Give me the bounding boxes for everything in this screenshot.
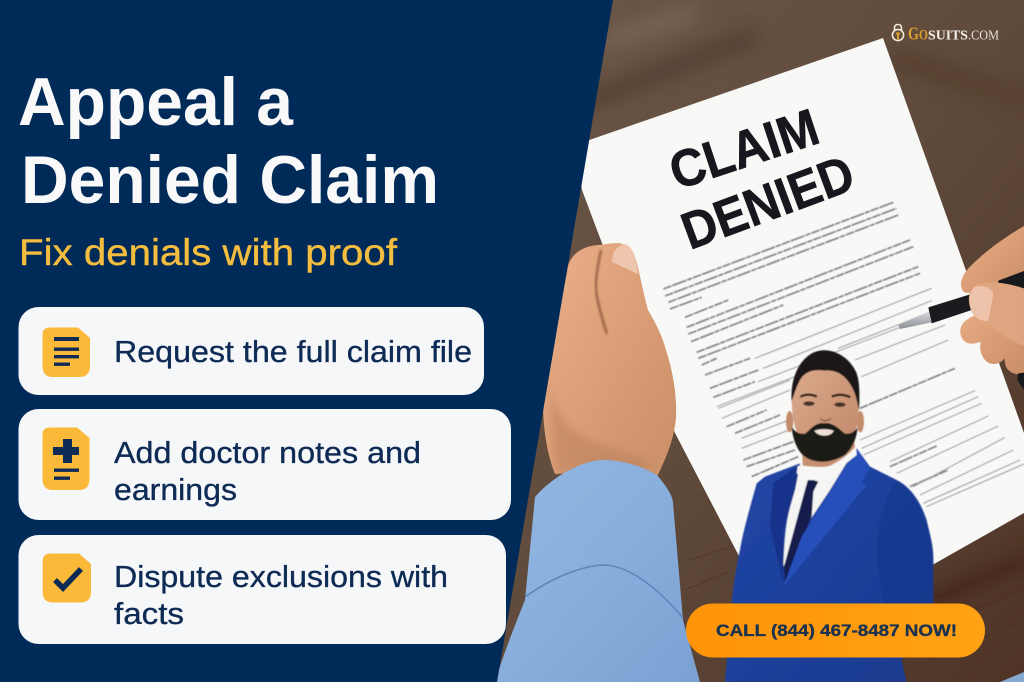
document heading: CLAIM DENIED: CLAIM — [663, 98, 826, 201]
label: earnings — [114, 472, 237, 507]
card: request file — [18, 307, 484, 395]
head — [786, 350, 864, 480]
title: Denied Claim — [21, 142, 439, 218]
sleeve shading — [876, 480, 933, 603]
title: Appeal a — [18, 64, 294, 140]
call to action button: CALL (844) 467-8487 NOW! — [716, 622, 957, 640]
thumb — [969, 282, 1024, 346]
suit jacket — [725, 447, 933, 682]
neck — [802, 430, 855, 479]
ears — [786, 411, 793, 432]
icon: lock shield — [892, 24, 904, 41]
label — [114, 559, 448, 631]
label: Dispute exclusions with — [114, 559, 448, 594]
label: facts — [114, 596, 184, 631]
icon: pen — [898, 271, 1024, 329]
necktie — [784, 478, 818, 582]
lapels — [783, 448, 870, 587]
document fine print — [663, 202, 1024, 507]
label — [114, 435, 421, 507]
title — [18, 64, 439, 218]
logo: GoSuits.com: SUITS — [928, 28, 968, 44]
wooden desk background — [490, 0, 1024, 682]
icon: check mark — [43, 554, 91, 602]
wordmark: GO — [908, 24, 928, 44]
label: Request the full claim file — [114, 334, 472, 369]
nose shadow — [820, 418, 831, 421]
collar — [797, 446, 857, 480]
icon: document lines — [42, 328, 90, 377]
hair — [791, 350, 859, 411]
icon: medical document — [42, 428, 90, 490]
thumb crease — [596, 250, 607, 334]
face — [792, 366, 858, 457]
paper document — [575, 38, 1024, 640]
subtitle: Fix denials with proof — [19, 232, 398, 273]
left hand holding paper — [543, 243, 676, 477]
eyebrows and eyes — [800, 395, 850, 407]
call to action button — [686, 604, 985, 658]
logo: GoSuits.com — [892, 24, 999, 44]
right hand holding pen — [898, 226, 1024, 390]
document heading: CLAIM DENIED: DENIED — [674, 145, 862, 261]
beard — [792, 423, 858, 462]
label: Add doctor notes and — [114, 435, 421, 470]
document heading: CLAIM DENIED — [663, 98, 862, 261]
index finger — [961, 226, 1024, 293]
thumb nail — [612, 244, 638, 274]
man in blue suit — [725, 350, 933, 682]
shirt sleeve and cuff — [495, 460, 700, 682]
lower fingers — [960, 293, 1024, 374]
smile — [814, 429, 834, 436]
card: doctor notes — [18, 409, 511, 520]
card: dispute exclusions — [18, 535, 506, 644]
logo: GoSuits.com: .COM — [968, 28, 999, 44]
navy panel — [0, 0, 613, 682]
shirt — [783, 447, 857, 567]
